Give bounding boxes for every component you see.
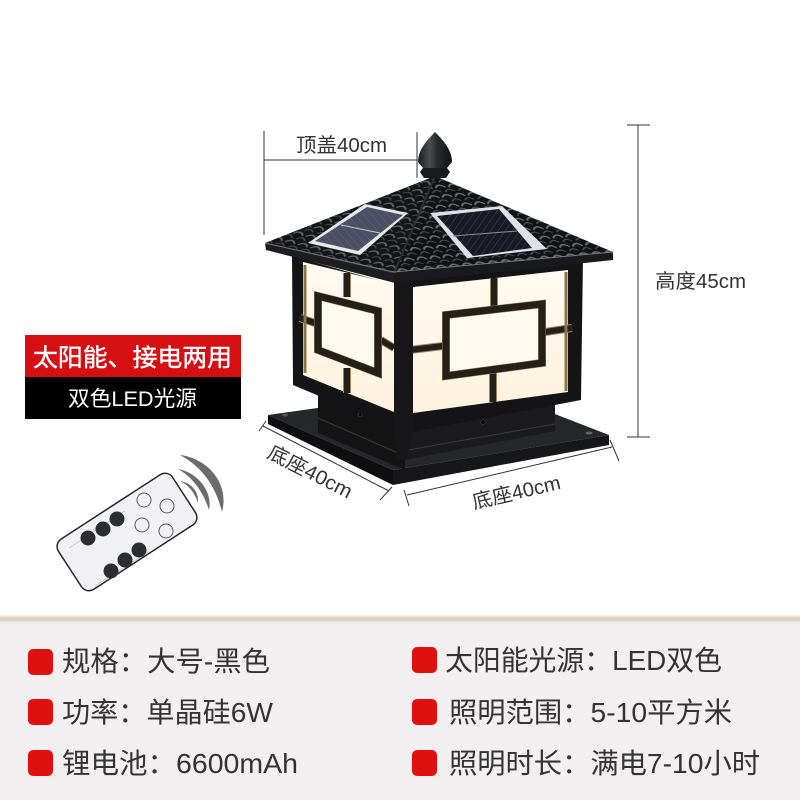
lamp roof xyxy=(265,176,613,283)
dimension: base depth 40cm: 底座40cm xyxy=(264,441,356,503)
lamp product xyxy=(265,132,613,485)
badge: dual colour LED xyxy=(25,377,241,419)
dimension: top cover 40cm: 顶盖40cm xyxy=(296,134,387,157)
spec: power: 功率：单晶硅6W xyxy=(62,697,274,728)
dimension: base width 40cm xyxy=(404,440,619,514)
badge: solar and mains: 太阳能、接电两用 xyxy=(33,344,232,372)
dimension: top cover 40cm xyxy=(264,131,417,235)
dimension: base depth 40cm xyxy=(259,421,392,503)
icon: remote control xyxy=(54,455,224,594)
badge: dual colour LED: 双色LED光源 xyxy=(68,387,197,411)
remote dark buttons xyxy=(80,512,146,578)
dimension: height 45cm xyxy=(627,125,746,437)
remote light buttons xyxy=(135,493,174,538)
spec: light source: 太阳能光源：LED双色 xyxy=(445,645,722,676)
lamp corner post xyxy=(394,270,413,460)
badge: solar and mains xyxy=(25,335,241,377)
lamp base plate xyxy=(268,385,609,485)
finial xyxy=(418,132,452,178)
spec: battery: 锂电池：6600mAh xyxy=(62,748,298,779)
solar panel left xyxy=(308,204,408,255)
spec: lighting range: 照明范围：5-10平方米 xyxy=(449,697,732,728)
lamp pedestal xyxy=(318,392,555,470)
dimension: base width 40cm: 底座40cm xyxy=(470,471,563,514)
remote signal waves xyxy=(178,455,224,512)
spec: lighting duration: 照明时长：满电7-10小时 xyxy=(449,748,760,779)
solar panel right xyxy=(430,206,547,258)
lamp left glass face xyxy=(292,256,395,428)
dimension: height 45cm: 高度45cm xyxy=(655,270,746,293)
lamp right glass face xyxy=(410,256,583,432)
specification panel xyxy=(0,614,800,800)
spec: size: 规格：大号-黑色 xyxy=(62,646,270,677)
